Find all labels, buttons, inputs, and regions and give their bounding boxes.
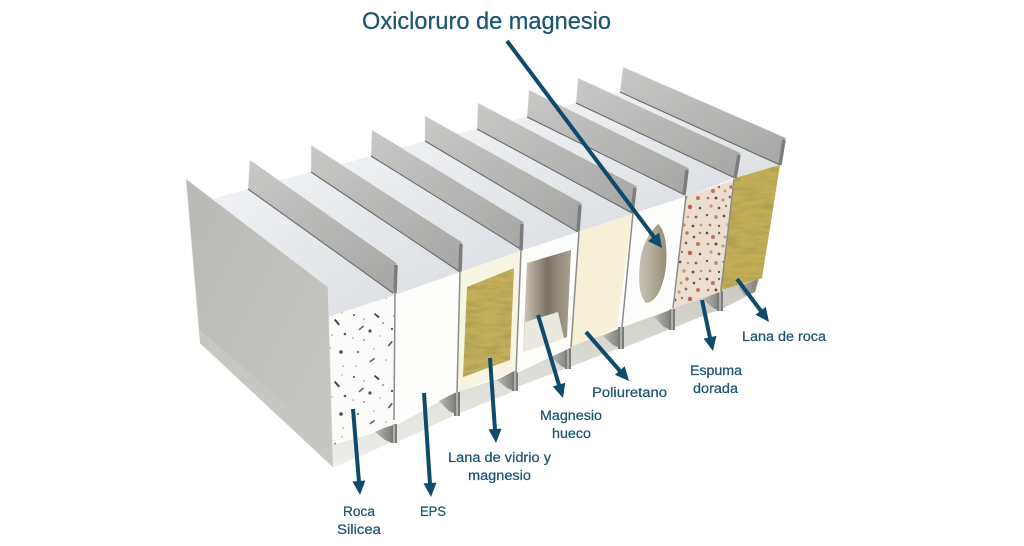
- label: EPS: EPS: [420, 504, 446, 519]
- label: lana de roca: Lana de roca: [742, 329, 827, 344]
- arrow: poliuretano: [586, 332, 629, 381]
- panel face: magnesio hueco: [517, 232, 578, 373]
- label: lana de vidrio y magnesio: magnesio: [468, 468, 531, 483]
- label: magnesio hueco: [540, 408, 602, 441]
- arrow: magnesio hueco: [538, 315, 565, 398]
- panel face: espuma dorada: [674, 180, 733, 308]
- label: espuma dorada: dorada: [693, 381, 739, 396]
- arrow: EPS: [424, 393, 436, 497]
- panel face: oxicloruro de magnesio: [623, 197, 685, 327]
- arrow: espuma dorada: [702, 300, 716, 351]
- label: poliuretano: Poliuretano: [592, 385, 667, 400]
- title: Oxicloruro de magnesio: [362, 8, 611, 35]
- panel face: EPS: [395, 272, 460, 418]
- label: roca silicea: [337, 504, 382, 537]
- panel joints: [394, 179, 734, 420]
- panel face: roca silicea: [328, 295, 395, 445]
- top surfaces and fins: [205, 67, 786, 317]
- label: magnesio hueco: Magnesio: [540, 408, 602, 423]
- panel face: poliuretano: [571, 214, 632, 347]
- arrow: oxicloruro de magnesio: [507, 41, 662, 248]
- label: magnesio hueco: hueco: [552, 426, 591, 441]
- panel face: lana de vidrio y magnesio: [457, 251, 520, 392]
- label: roca silicea: Silicea: [337, 522, 382, 537]
- label: lana de vidrio y magnesio: Lana de vidrio y: [448, 450, 551, 465]
- label: lana de vidrio y magnesio: [448, 450, 551, 483]
- label: roca silicea: Roca: [343, 504, 375, 519]
- panel body: lower metal strip: [333, 272, 762, 468]
- arrow: lana de vidrio: [488, 358, 502, 443]
- big side sheet: [186, 179, 333, 467]
- arrow: roca silicea: [352, 409, 365, 495]
- arrow: lana de roca: [737, 279, 769, 322]
- label: espuma dorada: [690, 363, 743, 396]
- panel face: lana de roca: [720, 165, 780, 290]
- label: espuma dorada: Espuma: [690, 363, 743, 378]
